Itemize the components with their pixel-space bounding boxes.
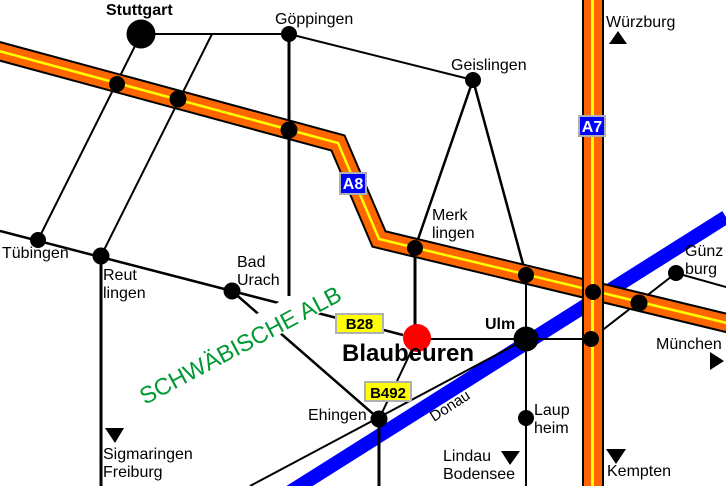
direction arrows bbox=[105, 31, 724, 465]
place labels: Würzburg bbox=[606, 14, 675, 31]
place labels: Stuttgart bbox=[106, 2, 173, 19]
place labels: Laup bbox=[534, 402, 570, 419]
Blaubeuren marker bbox=[403, 324, 431, 352]
shield: A8: A8 bbox=[343, 176, 363, 193]
place labels: München bbox=[656, 336, 722, 353]
place labels: burg bbox=[685, 261, 717, 278]
motorway A8 bbox=[0, 50, 726, 324]
shield: A7 bbox=[579, 116, 605, 136]
place labels: Tübingen bbox=[2, 245, 69, 262]
region label: Schwaebische Alb: SCHWÄBISCHE ALB bbox=[135, 281, 346, 409]
motorway A7 bbox=[582, 0, 604, 486]
place labels: Geislingen bbox=[451, 57, 527, 74]
place labels: Sigmaringen bbox=[103, 446, 193, 463]
place labels: Bad bbox=[237, 254, 265, 271]
place labels: Lindau bbox=[443, 448, 491, 465]
place labels: Göppingen bbox=[275, 11, 353, 28]
place labels: lingen bbox=[103, 285, 146, 302]
river: Donau bbox=[290, 217, 726, 486]
place labels: Ulm bbox=[485, 316, 515, 333]
place labels: Urach bbox=[237, 272, 280, 289]
place labels: Günz bbox=[685, 243, 723, 260]
place labels: heim bbox=[534, 420, 569, 437]
place labels: Ehingen bbox=[308, 407, 367, 424]
place labels: Merk bbox=[432, 207, 469, 224]
place labels: Bodensee bbox=[443, 466, 515, 483]
place labels: Freiburg bbox=[103, 464, 163, 481]
shield: B492 bbox=[365, 382, 411, 402]
shield: B492: B492 bbox=[370, 385, 406, 402]
shield: B28 bbox=[336, 314, 383, 333]
shield: A8 bbox=[340, 173, 366, 194]
junction and town nodes bbox=[30, 20, 684, 428]
place labels: lingen bbox=[432, 225, 475, 242]
shield: A7: A7 bbox=[582, 119, 602, 136]
place labels: Donau bbox=[427, 387, 473, 425]
place labels: Kempten bbox=[607, 463, 671, 480]
shield: B28: B28 bbox=[346, 316, 373, 333]
place labels: Blaubeuren bbox=[342, 340, 474, 367]
place labels: Reut bbox=[103, 267, 137, 284]
